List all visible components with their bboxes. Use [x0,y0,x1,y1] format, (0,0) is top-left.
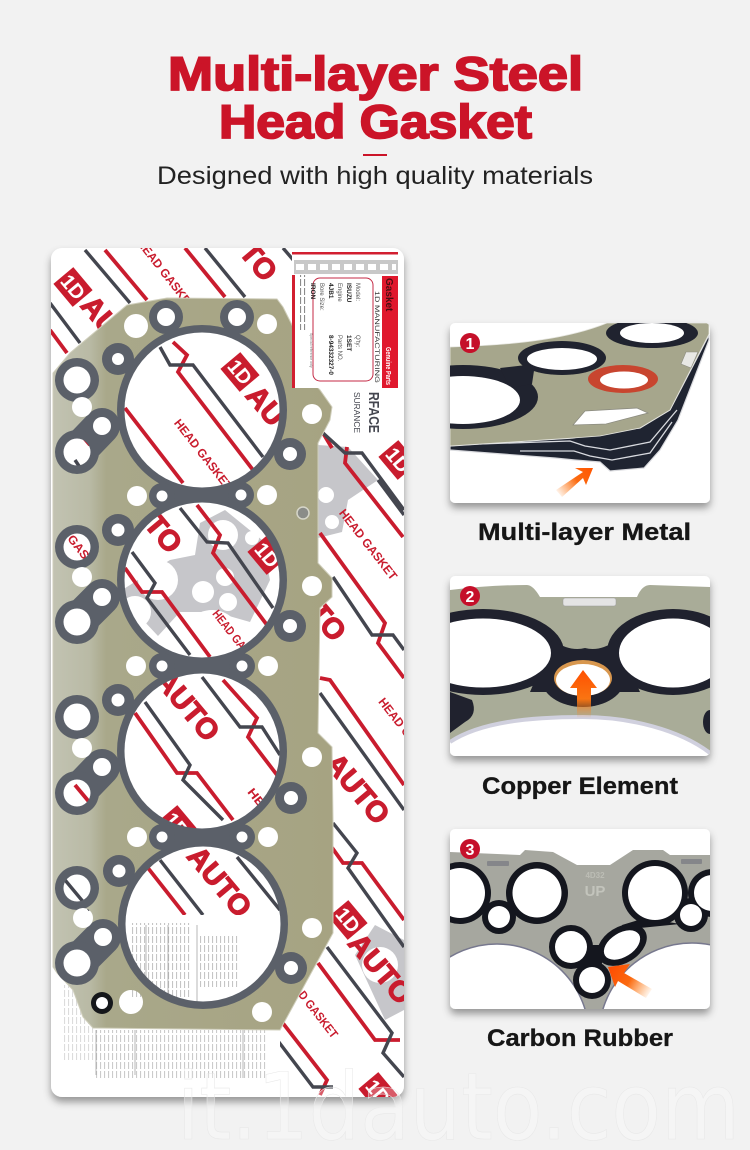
packaging: 1D logos [53,267,418,1112]
arrow [556,468,593,497]
product label card: 1D MANUFACTURING [373,291,380,383]
packaging: HEAD GASKET labels: HE [244,785,268,810]
product label card: Special reference only [309,333,313,368]
plate [450,585,710,753]
badge 3 [460,839,480,859]
slot [563,598,616,606]
bore holes [450,323,684,424]
left teardrop seals [77,426,103,963]
card 2: copper element [445,576,715,766]
dark seal rings [450,323,698,429]
packaging: HEAD GASKET labels: HEAD GASKET [134,236,199,313]
packaging: HEAD GASKET labels: GASK [65,532,98,569]
card 1: multi-layer metal [445,323,715,513]
packaging: AUTO wordmarks: TO [138,509,188,560]
large bores [450,943,586,1009]
packaging: 1D logos: 1D [331,904,364,938]
cylinder seals [121,329,284,1005]
title [168,47,583,148]
card 3: carbon rubber [445,829,715,1019]
label: Multi-layer Metal: Multi-layer Metal [478,519,691,546]
steel plate [450,323,709,446]
product label card: ISUZU [345,283,352,303]
product label card: Engine [336,283,342,302]
silver lower edge [450,717,710,753]
packaging: AUTO wordmarks: AUTO [341,928,418,1011]
arrow [608,964,652,998]
product label card: Parts NO. [336,335,342,362]
packaging: AUTO wordmarks: AU [74,290,126,343]
product label card: Genuine Parts [384,347,393,385]
badge 1: 1 [466,336,475,353]
stamped mark: UP [585,883,605,900]
slots [487,861,509,866]
slots [573,408,648,425]
red seal ring [588,365,658,393]
badge 2: 2 [466,589,475,606]
title divider [363,154,387,156]
badge 1 [460,333,480,353]
gasket [53,298,333,1030]
packaging: HEAD GASKET labels [65,236,415,1041]
product label card: 8-94332327-0 [327,335,334,375]
panel: gasket product photo [50,236,418,1112]
packaging: 1D logos: 1D [250,539,283,573]
small bores [450,866,710,993]
packaging: HEAD GASKET labels: HEAD GASKET [336,506,401,583]
packaging: dark diagonal lines [50,248,404,1087]
packaging: AUTO wordmarks: TO [233,237,283,288]
product label card: IRON [309,283,316,300]
plate [450,850,710,1012]
title: Multi-layer Steel [168,47,583,100]
badge 3: 3 [466,842,475,859]
product label card [292,252,398,388]
product label card: Model: [354,283,360,301]
metal layers [450,335,709,471]
badge 2 [460,586,480,606]
packaging: AUTO wordmarks: AUTO [180,841,257,924]
subtitle: Designed with high quality materials [157,162,593,190]
packaging: AUTO wordmarks [74,237,418,1011]
title: Head Gasket [219,95,532,148]
packaging: 1D logos: 1D [223,356,256,390]
product label card: 1SET [345,335,352,351]
packaging: AUTO wordmarks: AUTO [318,748,395,831]
packaging: red diagonal lines [50,248,404,1095]
product label card: Q'ty: [354,335,360,347]
instruction sheet [55,915,280,1085]
arrow [570,670,597,718]
packaging: HEAD GASKET labels: HEAD GASKET [171,416,236,493]
packaging: 1D logos: 1D [160,809,193,843]
packaging: vertical surface text: SURANCE [352,392,361,433]
product label card: 4JB1 [327,283,334,299]
label: Carbon Rubber: Carbon Rubber [487,1025,673,1052]
packaging: AUTO wordmarks: AU [239,380,291,433]
packaging: 1D logos: 1D [381,444,414,478]
label: Copper Element: Copper Element [482,773,678,800]
product label card: Bore Size: [318,283,324,311]
copper bore [554,660,612,696]
packaging: 1D logos: 1D [56,271,89,305]
packaging: HEAD GASKET labels: D GASKET [295,988,341,1041]
cylinder bridges [172,490,231,845]
dark seal [450,860,710,999]
packaging: 1D logos: 1D [361,1076,394,1110]
product label card: Gasket [383,278,394,312]
packaging: grey gear shapes [119,445,404,1020]
packaging: HEAD GASKET labels: HEAD G [375,695,415,740]
dark seal [450,609,710,734]
card 3: carbon rubber: 4D32 [585,871,605,880]
packaging: AUTO wordmarks: TO [302,597,352,648]
packaging: HEAD GASKET labels: HEAD GA [209,607,249,652]
packaging: vertical surface text [354,392,379,433]
round bolt seals [55,300,307,1014]
packaging: AUTO wordmarks: AUTO [148,665,225,748]
packaging: vertical surface text: RFACE [365,392,382,433]
silver rivet [297,507,309,519]
bores [450,618,551,688]
